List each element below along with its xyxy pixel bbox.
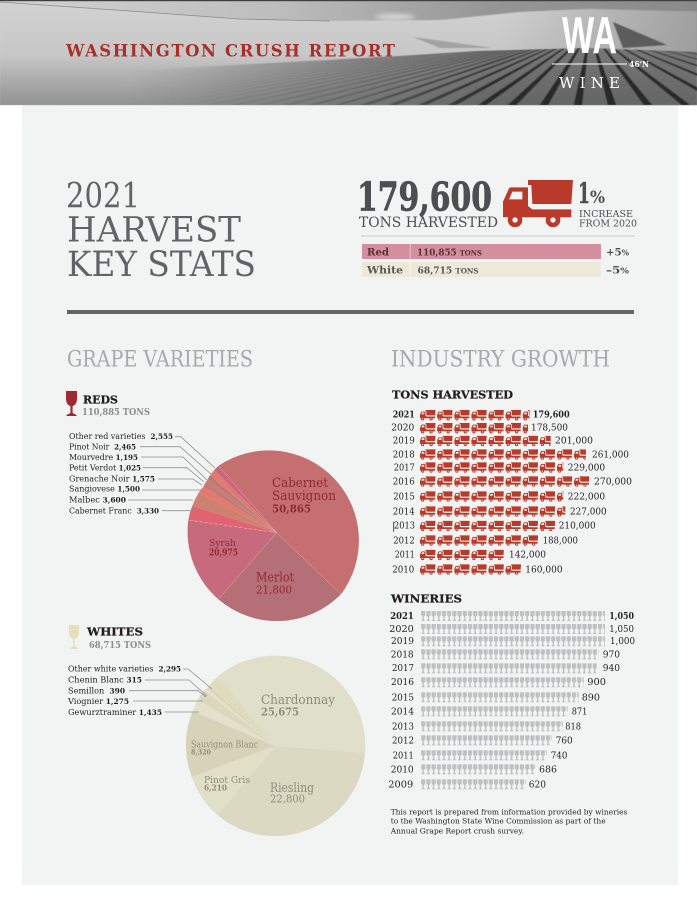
main heading <box>66 177 256 285</box>
pie label: Pinot Gris: 6,210 <box>204 784 227 794</box>
row 2011 <box>393 750 567 761</box>
pie label: Chardonnay: Chardonnay <box>261 693 336 708</box>
heading: industry growth: INDUSTRY GROWTH <box>391 348 610 373</box>
footnote: to the Washington State Wine Commission as part of the <box>391 816 606 825</box>
row 2012 <box>393 535 578 546</box>
bar: white tons: White <box>366 265 403 277</box>
reds labels: Other red varieties 2,555 <box>69 432 173 442</box>
pie label: Sauvignon Blanc: 8,320 <box>191 748 211 757</box>
row 2021: 2021 <box>390 611 414 622</box>
pie label: Riesling: 22,800 <box>270 792 305 806</box>
row 2021 <box>390 611 634 622</box>
reds labels: Grenache Noir 1,575 <box>69 475 155 485</box>
bar: red tons: 110,855 TONS <box>417 248 482 259</box>
reds pie chart <box>188 450 359 621</box>
whites labels: Chenin Blanc 315 <box>68 676 142 686</box>
row 2014 <box>391 706 587 717</box>
row 2020 <box>391 423 568 434</box>
whites heading: WHITES <box>86 625 143 639</box>
row 2014: 2014 <box>393 506 415 517</box>
row 2018: 261,000 <box>592 449 629 460</box>
main heading: 2021 <box>66 177 140 217</box>
row 2014 <box>393 506 607 517</box>
row 2021: 179,600 <box>533 410 570 421</box>
row 2019: 2019 <box>391 636 414 647</box>
footnote: This report is prepared from information provided by wineries <box>391 807 627 816</box>
whites labels: Viognier 1,275 <box>67 697 129 707</box>
row 2012: 188,000 <box>543 535 578 546</box>
row 2017 <box>394 462 605 473</box>
row 2019: 1,000 <box>610 636 635 647</box>
row 2020: 1,050 <box>609 624 634 635</box>
row 2016 <box>391 677 606 688</box>
row 2020 <box>389 624 634 635</box>
banner title: WASHINGTON CRUSH REPORT <box>65 42 396 61</box>
pie label: Sauvignon Blanc <box>191 741 258 757</box>
row 2015: 2015 <box>392 692 414 703</box>
row 2017: 229,000 <box>568 462 605 473</box>
row 2010: 2010 <box>391 764 414 775</box>
row 2016: 900 <box>587 677 606 688</box>
pie label: Syrah: 20,975 <box>209 549 238 559</box>
row 2013: 2013 <box>392 721 414 732</box>
row 2021: 2021 <box>393 410 415 421</box>
row 2018 <box>393 449 629 460</box>
wineries heading: WINERIES <box>390 591 462 605</box>
bar: white tons: 68,715 TONS <box>418 266 479 277</box>
logo: WA Wine 46N: WA <box>562 7 617 65</box>
pie label: Cabernet Sauvignon: Sauvignon <box>272 489 337 504</box>
row 2014: 2014 <box>391 706 414 717</box>
row 2014: 227,000 <box>570 506 607 517</box>
bar: white tons: –5% <box>606 265 629 277</box>
row 2021 <box>393 410 570 421</box>
row 2010: 2010 <box>392 564 414 575</box>
row 2010 <box>391 764 557 775</box>
stat: 1% increase: FROM 2020 <box>579 218 637 230</box>
row 2009 <box>388 779 546 790</box>
row 2012 <box>392 735 573 746</box>
icon: red wine glass <box>66 391 77 416</box>
row 2017: 2017 <box>394 462 415 473</box>
pie label: Cabernet Sauvignon: 50,865 <box>272 502 311 516</box>
stat: 1% increase: % <box>590 188 605 208</box>
logo: WA Wine 46N: 46'N <box>629 59 649 69</box>
pie label: Cabernet Sauvignon: Cabernet <box>272 476 329 491</box>
footnote <box>390 807 627 835</box>
row 2015: 222,000 <box>568 491 605 502</box>
row 2016: 2016 <box>393 476 415 487</box>
row 2010: 160,000 <box>525 564 563 575</box>
stat: 1% increase: 1 <box>578 177 590 210</box>
row 2018: 970 <box>603 650 620 661</box>
row 2017 <box>392 663 620 674</box>
row 2011: 740 <box>551 750 567 761</box>
reds leader lines <box>128 437 215 511</box>
row 2019: 2019 <box>393 435 415 446</box>
whites leader lines <box>129 669 212 712</box>
reds labels: Petit Verdot 1,025 <box>69 464 141 474</box>
pie label: Riesling: Riesling <box>270 781 314 796</box>
row 2013: 818 <box>565 721 581 732</box>
row 2013 <box>392 721 581 732</box>
whites heading <box>86 625 151 651</box>
reds labels: Cabernet Franc 3,330 <box>69 507 160 517</box>
stat: tons harvested <box>357 175 498 231</box>
tons harvested pictogram chart <box>391 410 632 575</box>
row 2020: 178,500 <box>531 423 568 434</box>
whites labels <box>67 665 181 718</box>
wineries pictogram chart <box>388 611 635 790</box>
whites labels: Other white varieties 2,295 <box>68 665 181 675</box>
reds labels: Malbec 3,600 <box>69 496 127 506</box>
pie label: Pinot Gris <box>204 775 250 794</box>
row 2010 <box>392 564 563 575</box>
row 2017: 2017 <box>392 663 414 674</box>
pie label: Merlot: 21,800 <box>256 583 292 597</box>
row 2015: 2015 <box>393 491 415 502</box>
row 2012: 2012 <box>393 535 415 546</box>
row 2016: 2016 <box>391 677 414 688</box>
whites pie chart <box>186 656 365 836</box>
row 2015 <box>393 491 605 502</box>
stat: 1% increase: INCREASE <box>579 209 633 220</box>
row 2011 <box>395 550 546 561</box>
bar: white tons <box>362 262 629 277</box>
reds labels: Sangiovese 1,500 <box>69 485 141 495</box>
bar: red tons: +5% <box>606 247 629 259</box>
row 2020: 2020 <box>391 423 414 434</box>
row 2013: 210,000 <box>559 521 596 532</box>
row 2018 <box>391 649 620 661</box>
tons harvested heading: TONS HARVESTED <box>392 387 513 401</box>
pie label: Merlot <box>256 571 295 597</box>
pie label: Pinot Gris: Pinot Gris <box>204 775 250 786</box>
row 2015 <box>392 692 600 703</box>
pie label: Chardonnay <box>261 693 336 719</box>
row 2018: 2018 <box>393 449 415 460</box>
row 2012: 760 <box>556 735 573 746</box>
logo: WA Wine 46N: WINE <box>559 74 620 92</box>
reds labels <box>69 432 173 517</box>
reds heading: 110,885 TONS <box>82 407 150 418</box>
row 2021: 1,050 <box>609 611 634 622</box>
reds labels: Mourvedre 1,195 <box>69 453 138 463</box>
bar: red tons <box>362 244 629 259</box>
row 2011: 2011 <box>395 550 415 561</box>
row 2019: 201,000 <box>555 435 593 446</box>
row 2010: 686 <box>539 764 557 775</box>
row 2015: 890 <box>582 692 600 703</box>
pie label: Merlot: Merlot <box>256 571 295 586</box>
pie label: Syrah: Syrah <box>209 538 236 549</box>
reds heading: REDS <box>83 393 118 407</box>
main heading: HARVEST <box>67 211 241 251</box>
row 2013 <box>393 521 596 532</box>
row 2013: 2013 <box>394 521 415 532</box>
row 2017: 940 <box>603 663 620 674</box>
pie label: Chardonnay: 25,675 <box>261 705 299 719</box>
bar: red tons: Red <box>367 247 390 259</box>
pie label: Syrah <box>209 538 238 559</box>
footnote: Annual Grape Report crush survey. <box>390 826 524 835</box>
reds heading <box>82 393 150 418</box>
row 2014: 871 <box>572 706 587 717</box>
row 2020: 2020 <box>389 624 414 635</box>
stat: 1% increase <box>578 177 637 230</box>
row 2019 <box>391 636 635 647</box>
main heading: KEY STATS <box>67 245 256 285</box>
logo: WA Wine 46N <box>552 7 649 92</box>
stat: tons harvested: TONS HARVESTED <box>359 215 498 231</box>
reds labels: Pinot Noir 2,465 <box>69 443 136 453</box>
whites heading: 68,715 TONS <box>89 640 151 651</box>
icon: white wine glass <box>69 625 79 649</box>
row 2011: 142,000 <box>509 550 546 561</box>
whites labels: Semillon 390 <box>68 686 126 696</box>
pie label: Cabernet Sauvignon <box>272 476 337 516</box>
row 2009: 620 <box>529 779 546 790</box>
row 2012: 2012 <box>392 735 414 746</box>
pie label: Riesling <box>270 781 314 806</box>
stat: tons harvested: 179,600 <box>357 175 492 221</box>
row 2009: 2009 <box>388 779 413 790</box>
pie label: Sauvignon Blanc: Sauvignon Blanc <box>191 741 258 751</box>
header banner: vineyard photograph <box>0 0 697 105</box>
heading: grape varieties: GRAPE VARIETIES <box>67 348 253 373</box>
row 2016 <box>393 476 632 487</box>
row 2019 <box>393 435 593 446</box>
row 2016: 270,000 <box>594 476 632 487</box>
whites labels: Gewurztraminer 1,435 <box>68 708 162 718</box>
row 2018: 2018 <box>391 650 414 661</box>
row 2011: 2011 <box>393 750 414 761</box>
icon: large truck <box>503 180 573 227</box>
